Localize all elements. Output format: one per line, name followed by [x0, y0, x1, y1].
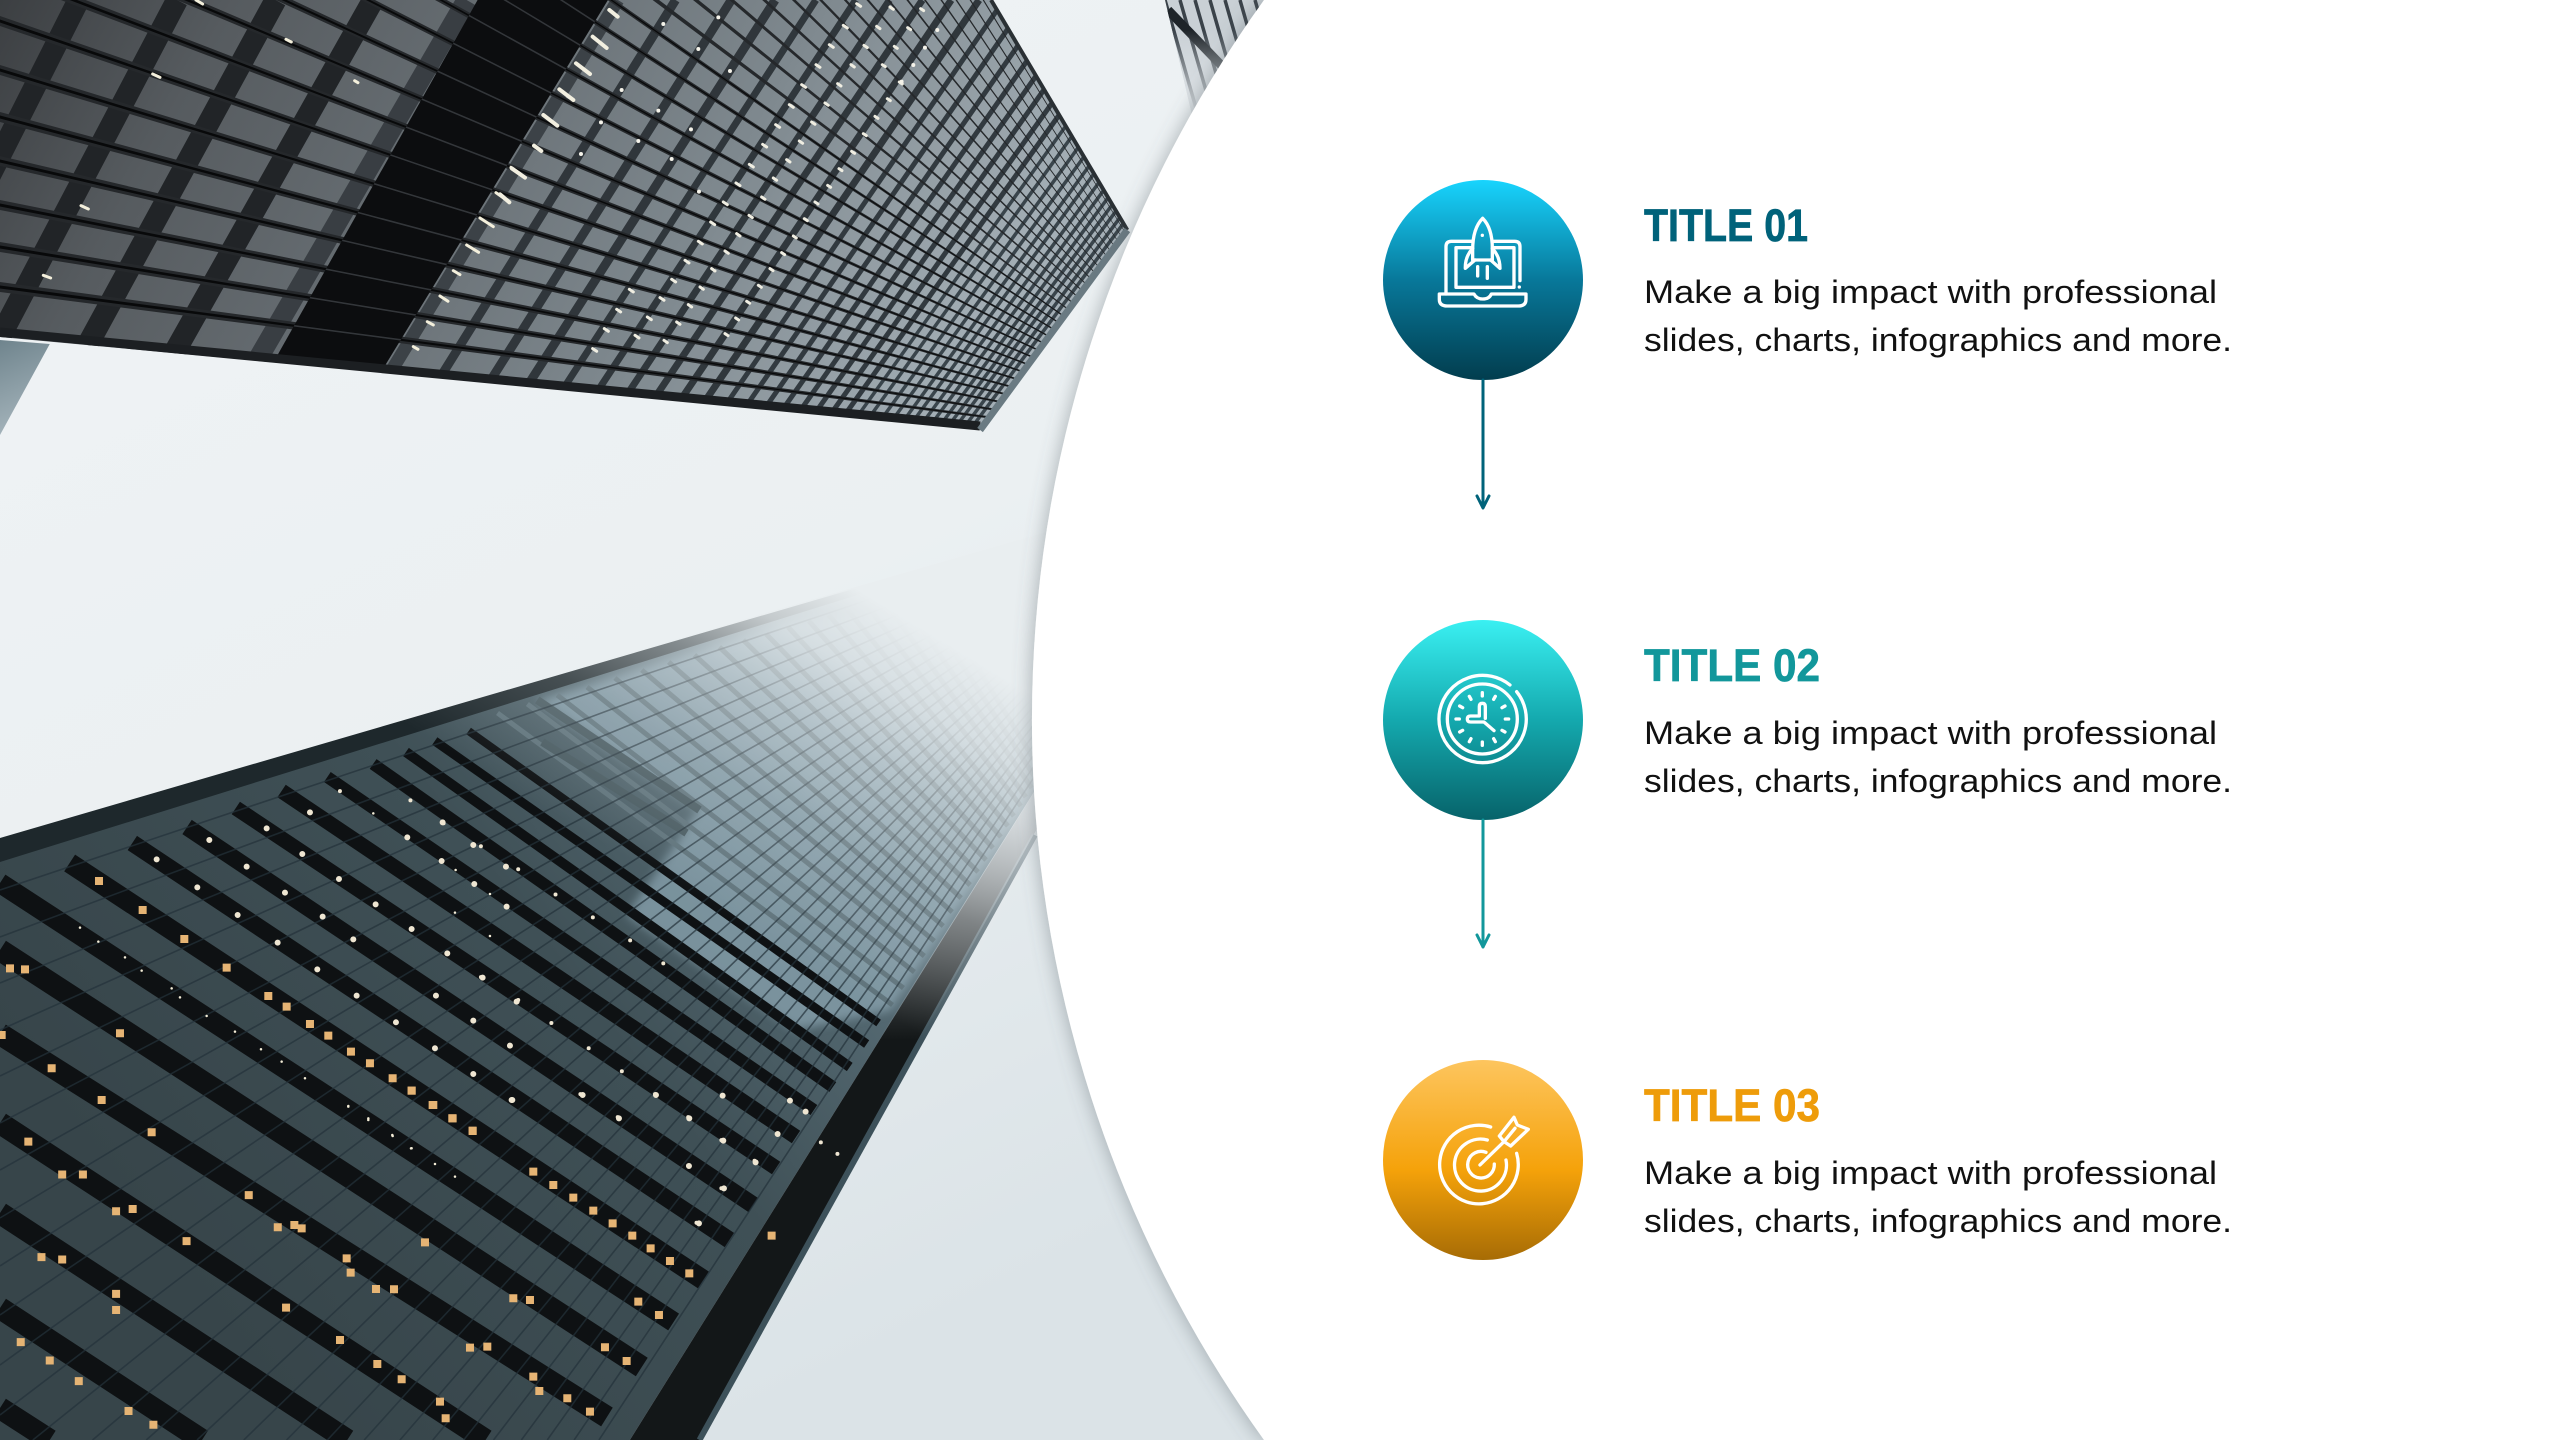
description 1: Make a big impact with professional	[1644, 274, 2217, 310]
step 2	[1383, 620, 2232, 947]
lower tower lit windows upper area	[21, 791, 837, 1425]
lower tower dark side face	[630, 479, 1230, 1440]
description 2: slides, charts, infographics and more.	[1644, 763, 2232, 799]
description 1: slides, charts, infographics and more.	[1644, 322, 2232, 358]
sky background	[0, 0, 1400, 1440]
icon: clock	[1439, 675, 1526, 763]
step 1	[1383, 180, 2232, 508]
distant building fragment top right	[1165, 0, 1264, 113]
title 01: TITLE 01	[1644, 200, 1808, 251]
upper tower lit windows right	[500, 4, 937, 351]
art group: distant building fragments and main towers	[0, 0, 1130, 1440]
arrow 1	[1477, 380, 1489, 508]
icon: rocket launching from laptop	[1439, 218, 1526, 306]
lower tower lit windows right	[302, 1091, 806, 1418]
icon: target with arrow	[1440, 1117, 1528, 1204]
description 3	[1644, 1155, 2232, 1239]
lower tower facade grid	[0, 626, 1030, 1440]
lower tower side highlight	[699, 835, 1035, 1440]
step 2 circle	[1383, 620, 1583, 820]
lower tower front face	[0, 479, 1230, 1440]
description 3: Make a big impact with professional	[1644, 1155, 2217, 1191]
lower tower side fog	[816, 479, 1230, 1140]
lower tower fog overlay	[0, 479, 1230, 1440]
upper tower edges	[0, 332, 980, 426]
lower tower top edge	[0, 479, 1230, 862]
step 1 circle	[1383, 180, 1583, 380]
title 03: TITLE 03	[1644, 1080, 1820, 1131]
upper tower facade grid	[0, 0, 1124, 422]
photo: skyscrapers seen from below	[0, 0, 1400, 1440]
upper tower front face	[0, 0, 1127, 428]
description 2	[1644, 715, 2232, 799]
title 02: TITLE 02	[1644, 640, 1820, 691]
description 3: slides, charts, infographics and more.	[1644, 1203, 2232, 1239]
description 2: Make a big impact with professional	[1644, 715, 2217, 751]
distant building fragment left	[0, 340, 50, 435]
step 3 circle	[1383, 1060, 1583, 1260]
lower tower lit windows left	[2, 812, 517, 1148]
step 3	[1383, 1060, 2232, 1260]
description 1	[1644, 274, 2232, 358]
arrow 2	[1477, 820, 1489, 947]
upper tower	[0, 0, 1130, 432]
lower tower	[0, 594, 1038, 1440]
white curved panel	[1032, 0, 2560, 1440]
upper tower lit windows left	[43, 0, 520, 349]
